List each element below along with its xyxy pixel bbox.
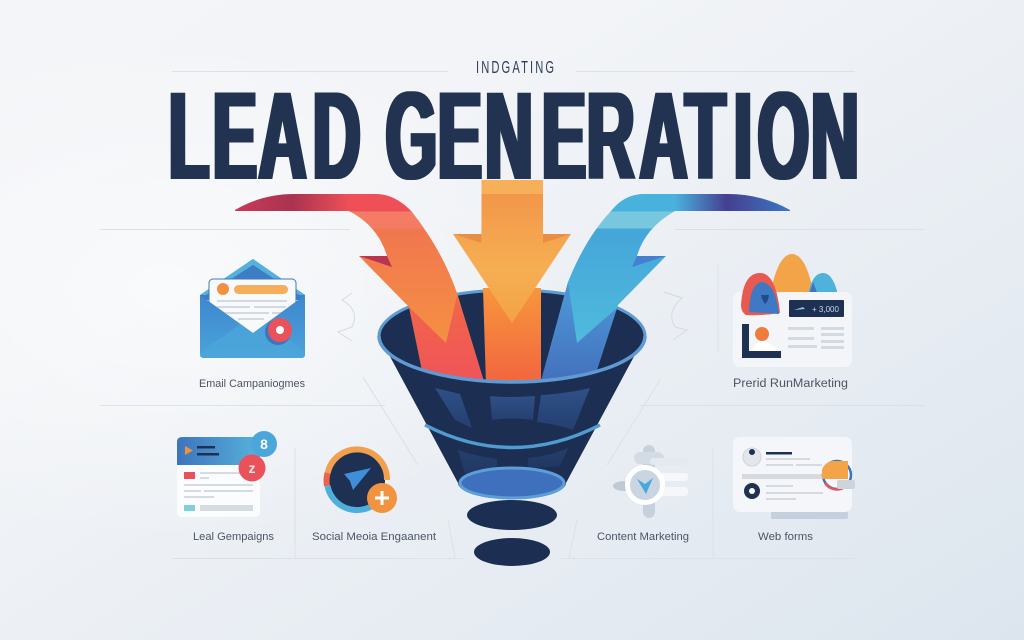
funnel mouth [379,290,645,382]
arrows [230,180,800,390]
label: lead campaigns: Leal Gempaigns [193,531,275,543]
icon: lead campaigns [177,431,277,517]
icon: paid run marketing [733,254,852,367]
icon: web forms [733,437,855,519]
icon: paid run marketing: + 3,000 [812,305,839,314]
label: content marketing: Content Marketing [597,531,689,543]
funnel drop upper [467,500,557,530]
right blue arrow [542,194,790,379]
funnel drop lower [474,538,550,566]
label: email: Email Campaniogmes [199,378,305,390]
left red orange arrow [235,194,484,380]
icon: social media [327,449,397,513]
funnel [379,290,645,499]
title: LEAD GENERATION [169,67,859,206]
label: social media: Social Meoia Engaanent [312,531,436,543]
icon: email envelope [200,259,305,358]
funnel inner ring [425,425,600,448]
label: web forms: Web forms [758,531,814,543]
eyebrow label: INDGATING [476,57,554,78]
funnel body [379,336,645,499]
funnel bottom opening [460,468,564,498]
funnel glass panels [435,388,590,478]
icon: content marketing [613,445,688,518]
centre orange arrow [453,180,571,385]
funnel front rim [379,336,645,382]
icon: lead campaigns: 8 [260,436,268,452]
icon: lead campaigns: z [248,460,256,476]
label: paid run marketing: Prerid RunMarketing [733,378,848,390]
